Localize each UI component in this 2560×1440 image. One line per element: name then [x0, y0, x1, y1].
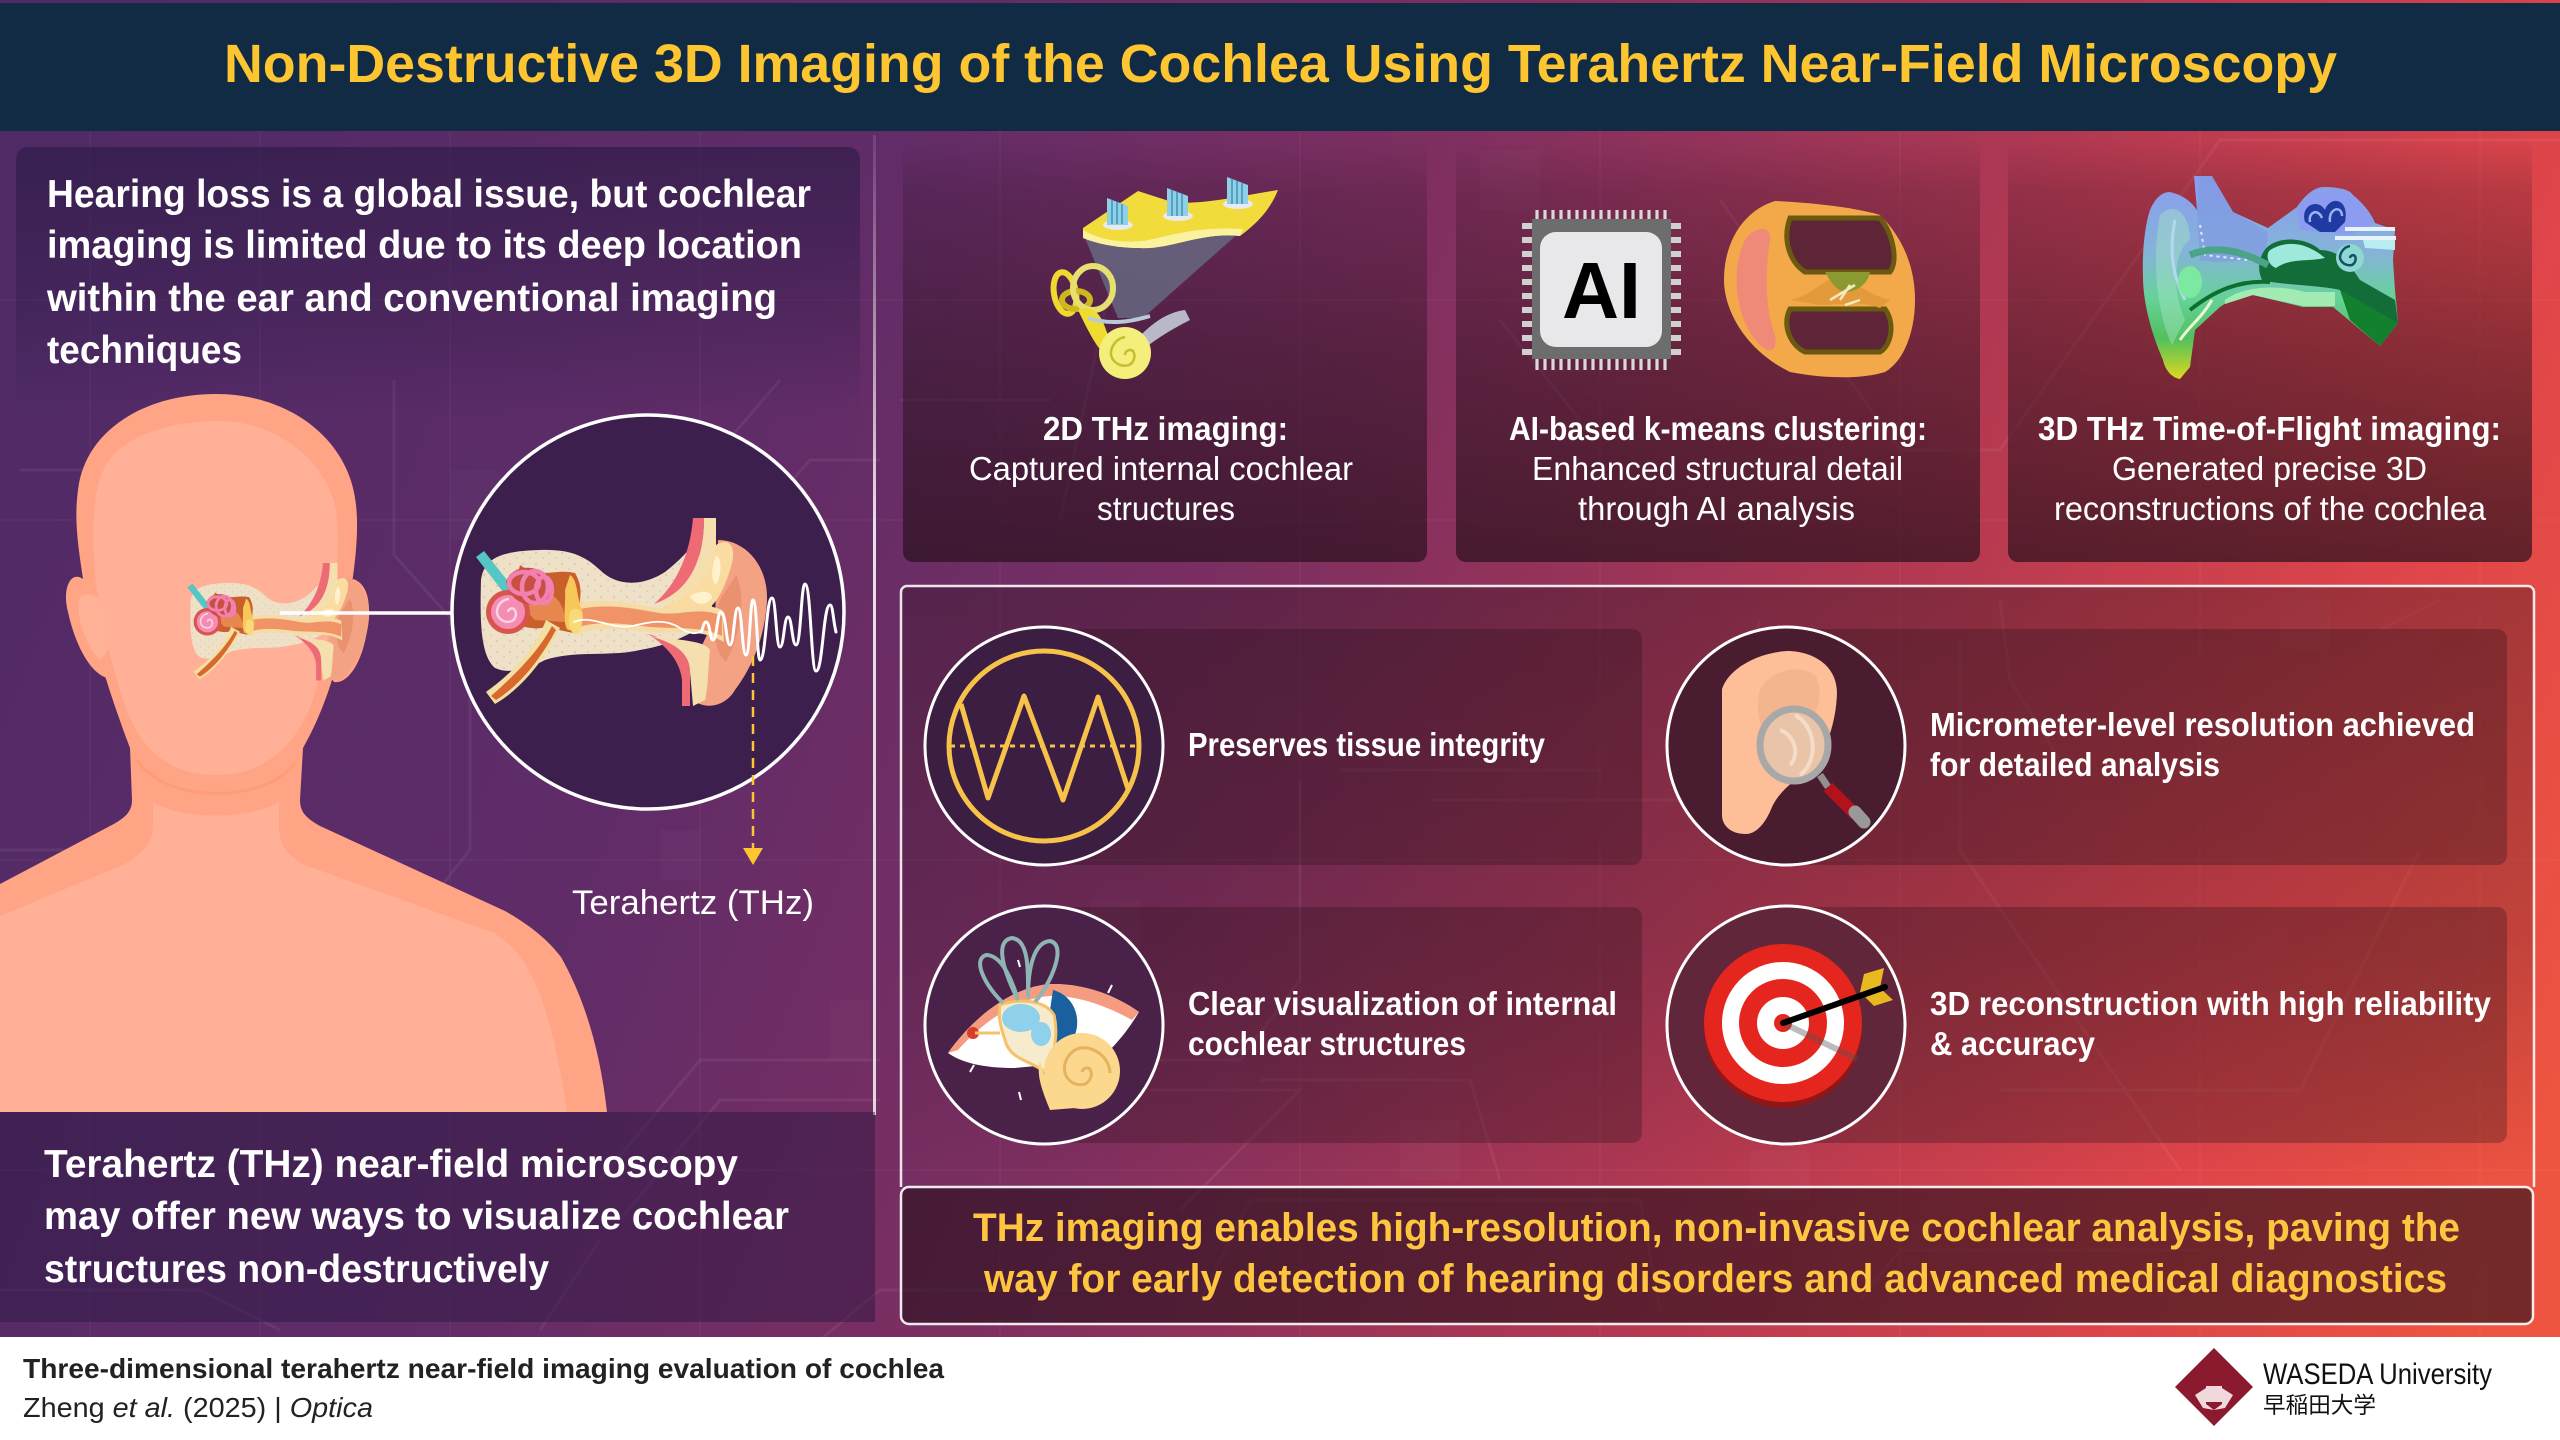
conclusion text: THz imaging enables high-resolution, non-invasive cochlear analysis, paving the [973, 1206, 2460, 1250]
card text: Generated precise 3D [2112, 450, 2427, 487]
card text: reconstructions of the cochlea [2054, 490, 2487, 527]
connector line [280, 611, 452, 615]
conclusion text: way for early detection of hearing disorders and advanced medical diagnostics [983, 1257, 2447, 1301]
panel: intro text [16, 147, 860, 417]
card text: through AI analysis [1578, 490, 1855, 527]
summary text: may offer new ways to visualize cochlear [44, 1195, 789, 1238]
benefit: clear visualization [925, 906, 1617, 1144]
panel: benefits frame [901, 586, 2534, 1187]
conclusion text [973, 1206, 2460, 1301]
benefit: 3D reconstruction: & accuracy [1930, 1025, 2096, 1062]
label: terahertz: Terahertz (THz) [572, 884, 814, 922]
icon: ear with magnifier [1667, 627, 1905, 865]
benefit: preserves tissue integrity [925, 627, 1546, 865]
footer [0, 1337, 2560, 1440]
divider line [873, 135, 876, 1115]
intro paragraph: techniques [47, 329, 242, 372]
intro paragraph: Hearing loss is a global issue, but cochlear [47, 173, 811, 216]
card text: Captured internal cochlear [969, 450, 1353, 487]
row panels [1044, 629, 2507, 1143]
citation [23, 1353, 944, 1423]
card text [1509, 410, 1927, 527]
small ear anatomy in head [187, 563, 369, 680]
intro paragraph [46, 173, 811, 372]
icon: cochlea with near-field probe [1051, 177, 1278, 379]
benefit: micrometer resolution [1667, 627, 2475, 865]
citation: Zheng et al. (2025) | Optica [23, 1392, 373, 1423]
summary text: structures non-destructively [44, 1248, 549, 1291]
logo: Waseda University [2175, 1348, 2492, 1426]
icon: cochlear cross-section [1724, 201, 1915, 377]
benefit: clear visualization: cochlear structures [1188, 1025, 1466, 1062]
logo: Waseda University: WASEDA University [2263, 1358, 2492, 1391]
logo: Waseda University: 早稲田大学 [2263, 1393, 2376, 1418]
card text: 2D THz imaging: [1043, 410, 1288, 447]
title: Non-Destructive 3D Imaging of the Cochlea Using Terahertz Near-Field Microscopy [224, 34, 2337, 94]
icon: AI chip: AI [1562, 246, 1641, 335]
card text [969, 410, 1353, 527]
benefit: micrometer resolution: for detailed analysis [1930, 746, 2220, 783]
icon: AI chip [1522, 210, 1681, 370]
card text: AI-based k-means clustering: [1509, 410, 1927, 447]
icon: 3D ear reconstruction [2143, 176, 2398, 379]
benefit: clear visualization: Clear visualization of internal [1188, 985, 1617, 1022]
summary text: Terahertz (THz) near-field microscopy [44, 1143, 738, 1186]
icon: eye with cochlea [925, 906, 1163, 1144]
intro paragraph: within the ear and conventional imaging [46, 277, 777, 320]
benefit: preserves tissue integrity: Preserves tissue integrity [1188, 726, 1546, 763]
summary text [44, 1143, 789, 1291]
card: 3D THz time-of-flight [2008, 140, 2532, 562]
card text: structures [1097, 490, 1235, 527]
terahertz wave [574, 584, 836, 671]
magnified ear circle [452, 415, 844, 865]
icon: waveform [925, 627, 1163, 865]
card: 2D THz imaging [903, 140, 1427, 562]
panel: THz summary [0, 1112, 875, 1322]
background squares [450, 150, 2330, 1200]
human head silhouette [0, 394, 607, 1112]
benefit: 3D reconstruction: 3D reconstruction with high reliability [1930, 985, 2492, 1022]
card text: 3D THz Time-of-Flight imaging: [2038, 410, 2501, 447]
dashed arrow to label [743, 656, 763, 865]
card text: Enhanced structural detail [1532, 450, 1903, 487]
citation: Three-dimensional terahertz near-field imaging evaluation of cochlea [23, 1353, 944, 1384]
callout: conclusion [901, 1187, 2533, 1324]
benefit: 3D reconstruction [1667, 906, 2492, 1144]
card: AI k-means clustering [1456, 140, 1980, 562]
icon: target with arrow [1667, 906, 1905, 1144]
header bar [0, 3, 2560, 131]
benefit: micrometer resolution: Micrometer-level resolution achieved [1930, 706, 2475, 743]
card text [2038, 410, 2501, 527]
intro paragraph: imaging is limited due to its deep location [47, 224, 802, 267]
